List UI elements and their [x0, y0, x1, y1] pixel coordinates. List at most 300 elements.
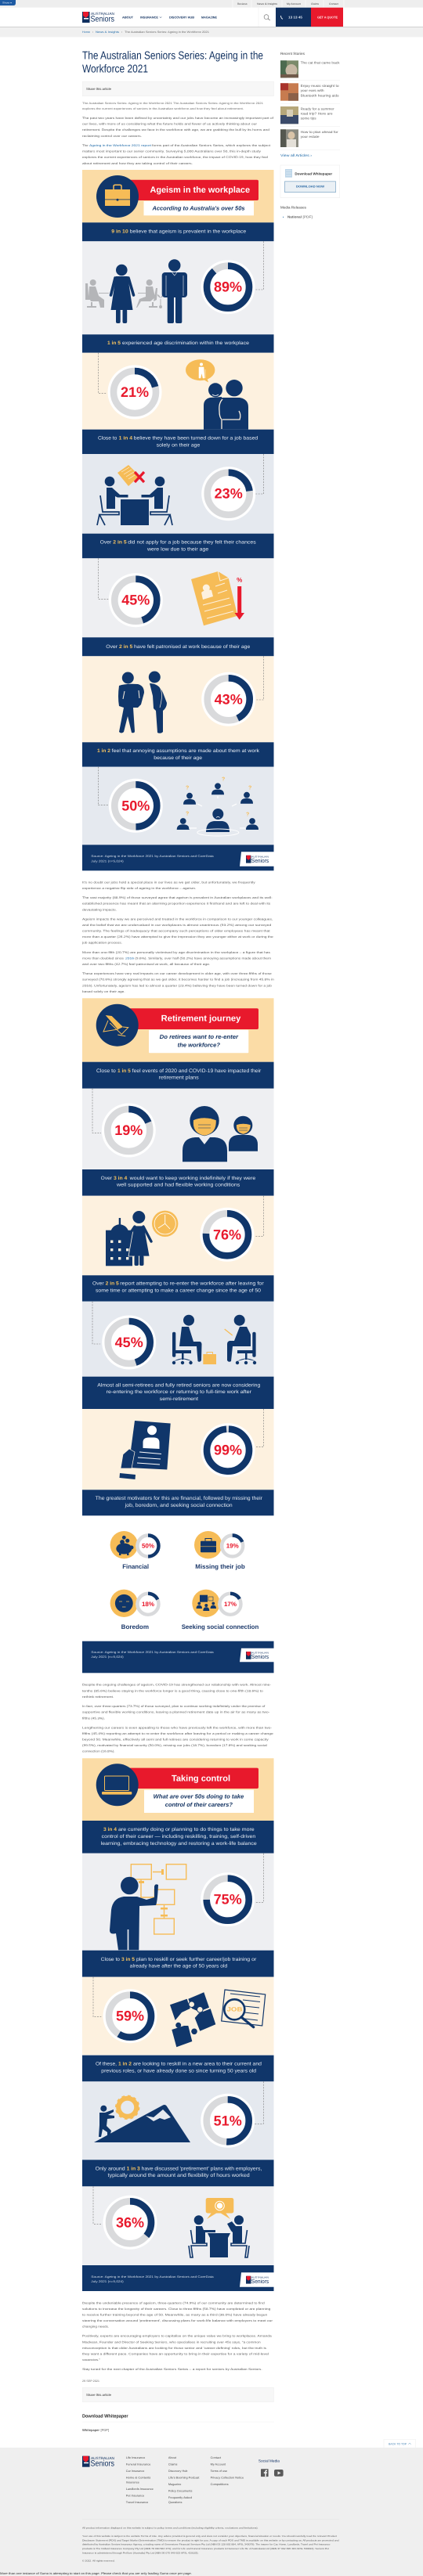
intro text: explores the current experiences of seniors in the Australian workforce and how they feel about retirement. — [82, 107, 244, 110]
donut: 19%: 19% — [114, 1122, 143, 1138]
back to top tab — [384, 2439, 415, 2448]
main navigation: ABOUT — [122, 16, 134, 19]
icon: person surrounded by questioning people: ? — [248, 786, 251, 791]
stat band: 1 in 2 reskill — [82, 2055, 274, 2081]
logo tab — [240, 2272, 274, 2287]
stat band: over 2 in 5 did not apply: were low due to their age — [146, 546, 209, 553]
legal text: All product information displayed on this website is subject to policy terms and conditions (including eligibility criteria, exclusions and limitations). — [82, 2527, 258, 2530]
source footer band 1: July 2021 (n=5,024) — [91, 859, 125, 863]
body text: retirement: supportive and flexible working conditions, leaving a planned retirement date up in the air for as many as two- — [82, 1711, 270, 1714]
stat band: 1 in 5: experienced age discrimination within the workplace — [122, 340, 250, 346]
breadcrumb: News & Insights — [96, 31, 119, 34]
icon: woman, building and clock — [106, 1211, 178, 1266]
story: bluetooth hearing aids: Bluetooth hearing aids — [301, 93, 339, 97]
stat band: 2 in 5 re-enter: Over — [92, 1281, 104, 1287]
panel: 99 percent — [82, 1409, 274, 1490]
download whitepaper section: Whitepaper — [82, 2428, 99, 2432]
footer links: company: Life's Booming Podcast — [168, 2476, 199, 2479]
donut: 45% second: 45% — [115, 1335, 143, 1350]
panel: 45 percent — [82, 558, 274, 637]
share bar lower — [82, 2387, 274, 2402]
donut: 21% — [108, 365, 161, 420]
body text: ageism: and over two-fifths (42.7%) feel patronised at work, all because of their age. — [82, 963, 210, 966]
panel: 43 percent — [82, 656, 274, 742]
legal text: © 2022. All rights reserved. — [82, 2559, 115, 2562]
logo tab: Seniors — [251, 2278, 269, 2285]
date: 29 SEP 2021 — [82, 2380, 99, 2383]
social media — [258, 2459, 284, 2477]
source footer band 3 — [82, 2265, 274, 2291]
donut: 45%: 45% — [121, 593, 150, 608]
body text: introduction: Ageing in the Workforce 2021 report — [89, 144, 152, 147]
logo tab: AUSTRALIAN — [251, 1652, 269, 1655]
story: bluetooth hearing aids — [280, 83, 339, 101]
stat band: 1 in 2 reskill: 1 in 2 — [118, 2062, 132, 2066]
body text: ageism: community. The feelings of inadequacy that accompany such perceptions of older employees has meant that — [82, 930, 271, 933]
banner: retirement journey: the workforce? — [178, 1041, 220, 1049]
sidebar: whitepaper card — [280, 165, 340, 198]
footer links: insurance: Car Insurance — [126, 2470, 144, 2473]
motivator: seeking social connection: Seeking social connection — [182, 1623, 258, 1630]
source footer band 1 — [82, 845, 274, 870]
story: plan ahead for estate: your estate — [301, 135, 320, 139]
footer logo — [82, 2456, 114, 2468]
body text: ageism: more than doubled since — [82, 957, 124, 960]
script notice: More than one instance of Sumo is attempting to start on this page. Please check that you are only loading Sumo once per page. — [0, 2571, 192, 2575]
stat band: 1 in 5: 1 in 5 — [107, 340, 121, 346]
sidebar: media releases: [PDF] — [302, 215, 313, 219]
stat band: 1 in 5 retirement plans: Close to — [96, 1068, 116, 1074]
legal text — [82, 2527, 339, 2562]
breadcrumb: › — [92, 31, 94, 34]
source footer band 2: July 2021 (n=5,024) — [91, 1655, 125, 1659]
top utility bar: Claims — [311, 2, 319, 5]
icon: rejected job interview — [97, 465, 172, 525]
panel: 51 percent — [82, 2081, 274, 2160]
banner: retirement journey: Do retirees want to re-enter — [160, 1033, 239, 1040]
stat band: 2 in 5 re-enter — [82, 1275, 274, 1302]
legal text: Disclosure Statement (PDS) and Target Market Determination (TMD) to ensure the product is right for you. A copy of each PDS and TMD is available on this website or by contacting us. All products are promoted and — [82, 2538, 339, 2542]
stat band: 1 in 4: believe they have been turned down for a job based — [134, 435, 258, 441]
body text: ageism: These experiences have very real impacts on our career development in older age, with over three-fifths of those — [82, 972, 272, 975]
panel: 19 percent — [82, 1089, 274, 1169]
body text: retirement: In fact, over three-quarters (73.7%) of those surveyed, plan to continue working indefinitely under the premise of — [82, 1705, 266, 1708]
body text: ageism: experience a negative flip side of ageing in the workforce – ageism. — [82, 887, 196, 890]
stat band: semi-retirees: re-entering the workforce or returning to full-time work after — [107, 1389, 251, 1395]
icon: two people talking down — [118, 672, 167, 733]
main navigation: MAGAZINE — [201, 16, 217, 19]
body text: retirement: Lengthening our careers is even appealing to those who have previously left the workforce, with more than two- — [82, 1726, 273, 1729]
body text: introduction: forms part of the Australian Seniors Series, which explores the subject — [152, 144, 271, 147]
footer links: account — [211, 2456, 244, 2486]
stat band: pretirement: Only around — [96, 2167, 125, 2171]
stat band: 3 in 5: already have after the age of 50 years old — [130, 1963, 228, 1969]
body text: taking control: they want a different pace. Companies have an opportunity to bring in their expertise for a variety of mid-level — [82, 2353, 269, 2356]
body text: taking control: vacancies." — [82, 2358, 101, 2362]
body text: retirement: connection (16.8%). — [82, 1750, 115, 1753]
donut: 51% — [201, 2094, 255, 2148]
banner: taking control — [82, 1758, 274, 1821]
top utility bar: Reviews — [237, 2, 248, 5]
legal text: Your use of this website is subject to the website Terms of Use. Any advice provided is general only and does not consider your objectives, financial situation or needs. You should carefully read the relevant Product — [82, 2535, 337, 2538]
legal text: distributed by Australian Seniors Insurance Agency, a trading name of Greenstone Financial Services Pty Ltd (ABN 53 128 692 884, AFSL 343079). The insurer for Car, Home, Landlords, Travel and Pet Insurance — [82, 2543, 331, 2546]
story: summer road trip: some tips — [301, 116, 316, 121]
donut: 76% — [201, 1208, 254, 1262]
stat band: 3 in 4: would want to keep working indefinitely if they were — [129, 1176, 256, 1181]
donut: 59% — [103, 1989, 157, 2043]
logo tab: AUSTRALIAN — [251, 855, 269, 858]
stat band: 2 in 5 re-enter: 2 in 5 — [106, 1281, 119, 1287]
body text: retirement — [82, 1684, 273, 1753]
stat band: 1 in 4: Close to — [98, 435, 118, 441]
footer links: account: My Account — [211, 2463, 226, 2466]
stat band: patronised: Over — [106, 644, 118, 650]
footer links: insurance: Life Insurance — [126, 2456, 145, 2459]
banner: ageism in the workplace: According to Australia's over 50s — [152, 205, 244, 211]
body text: ageism: 2016 — [125, 957, 134, 960]
stat band: pretirement: have discussed 'pretirement' plans with employers, — [142, 2167, 262, 2171]
body text: ageism: It's no doubt our jobs hold a special place in our lives as we get older, but unfortunately, we frequently — [82, 881, 255, 884]
icon: meeting with speech bubble — [189, 2198, 249, 2257]
body text: taking control: Mackean, Founder and Director of Seeking Seniors, who specialises in recruiting over 45s says, "a common — [82, 2340, 261, 2344]
stat band: 1 in 5 retirement plans: retirement plans — [159, 1075, 199, 1080]
main navigation — [122, 16, 217, 19]
title: Workforce 2021 — [82, 63, 148, 75]
donut: 51%: 51% — [214, 2113, 242, 2128]
download whitepaper section — [82, 2414, 274, 2432]
panel: 23 percent — [82, 454, 274, 534]
stat band: patronised: have felt patronised at work because of their age — [134, 644, 251, 650]
logo — [82, 12, 114, 24]
footer links: insurance — [126, 2456, 154, 2504]
sidebar: recent stories: Recent Stories — [280, 52, 306, 56]
story: the cat that came back: The cat that came back — [301, 61, 341, 64]
donut: 75% — [201, 1872, 255, 1926]
stat band: over 2 in 5 did not apply — [82, 534, 274, 558]
footer logo: AUSTRALIAN — [91, 2456, 114, 2460]
body text: introduction: about retirement and how they are taking control of their careers. — [82, 162, 193, 165]
donut: 75%: 75% — [214, 1892, 242, 1908]
stat band: 1 in 5 — [82, 334, 274, 353]
body text: ageism: based solely on their age. — [82, 990, 125, 993]
stat band: 3 in 4 taking control: are currently doing or planning to do things to take more — [118, 1827, 255, 1832]
logo tab — [240, 852, 274, 866]
stat band: 9 in 10 — [82, 222, 274, 241]
stat band: over 2 in 5 did not apply: 2 in 5 — [113, 540, 127, 545]
title — [82, 49, 263, 75]
top utility bar: Contact — [329, 2, 338, 5]
stat band: 1 in 2 reskill: are looking to reskill in a new area to their current and — [133, 2062, 262, 2066]
source footer band 3: Source: Ageing in the Workforce 2021 by Australian Seniors and CoreData — [91, 2275, 215, 2279]
body text: retirement: fifths (45.3%). — [82, 1717, 105, 1720]
donut: 76%: 76% — [213, 1227, 241, 1242]
donut: 45% — [109, 573, 163, 627]
icon: hand holding resume — [119, 1421, 171, 1479]
panel: 45 percent re-entering — [82, 1302, 274, 1377]
story: summer road trip — [280, 106, 334, 124]
footer links: company: Frequently Asked — [168, 2496, 192, 2499]
stat band: pretirement: 1 in 3 — [127, 2167, 140, 2171]
banner: taking control: control of their careers? — [165, 1801, 233, 1808]
body text: ageism: 2016). Unfortunately, ageism has led to almost a quarter (23.4%) believing they have been turned down for a job — [82, 984, 272, 987]
body text: ageism: (9.6%). Similarly, over half (50.2%) have annoying assumptions made about them — [135, 957, 271, 960]
body text: ageism — [81, 881, 274, 993]
footer links: company: Questions — [168, 2501, 183, 2504]
stat band: assumptions: 1 in 2 — [97, 748, 111, 754]
body text: retirement: beyond 50. Meanwhile, effectively all semi and full retirees are considering returning to work in some capacity — [82, 1738, 269, 1741]
body text: ageism: established presence has meant that an alarming proportion experience it firsthand and are left to deal with its — [82, 903, 270, 906]
footer links: company: About — [168, 2456, 176, 2459]
source footer band 1: Source: Ageing in the Workforce 2021 by Australian Seniors and CoreData — [91, 854, 215, 858]
stat band: 1 in 4: 1 in 4 — [119, 435, 133, 441]
stat band: 3 in 4 — [82, 1169, 274, 1196]
body text: taking control: Stay tuned for the next chapter of the Australian Seniors Series – a report for seniors by Australian Seniors. — [82, 2368, 262, 2371]
donut: 36%: 36% — [116, 2214, 144, 2230]
banner: ageism in the workplace — [82, 170, 274, 222]
body text: introduction: reclaiming control over our careers. — [82, 135, 142, 138]
main navigation: INSURANCE — [140, 16, 158, 19]
stat band: patronised — [82, 637, 274, 656]
body text: retirement: tenths (85.6%) believe staying in the workforce longer is a good thing, causing close to one-fifth (18.6%) to — [82, 1689, 263, 1692]
body text: ageism: The vast majority (88.9%) of those surveyed agree that ageism is prevalent in Australian workplaces and its well- — [82, 896, 273, 899]
motivator: boredom: 18% — [142, 1601, 154, 1608]
stat band: 1 in 5 retirement plans: feel events of 2020 and COVID-19 have impacted their — [132, 1068, 262, 1074]
sidebar: media releases — [280, 205, 313, 219]
breadcrumb: Home — [82, 31, 90, 34]
stat band: semi-retirees: semi-retirement — [160, 1396, 198, 1402]
stat band: motivators: job, boredom, and seeking social connection — [125, 1503, 233, 1508]
stat band: 1 in 5 retirement plans — [82, 1062, 274, 1089]
stat band: pretirement — [82, 2160, 274, 2186]
icon: search — [264, 15, 270, 20]
top utility bar — [0, 0, 423, 8]
banner: retirement journey — [82, 998, 274, 1062]
icon: resume with falling percent arrow — [191, 571, 244, 625]
logo tab: AUSTRALIAN — [251, 2275, 269, 2279]
body text: retirement: (99.5%), motivated by financial security (50.0%), missing our jobs (18.7%), boredom (17.8%) and seeking social — [82, 1744, 267, 1747]
motivator: missing their job — [194, 1531, 245, 1570]
icon: laptop — [102, 1776, 132, 1795]
stat band: 3 in 5: plan to reskill or seek further career/job training or — [136, 1957, 256, 1962]
story: summer road trip: Ready for a summer — [301, 106, 334, 111]
icon: resume with falling percent arrow: % — [237, 576, 242, 584]
footer — [0, 2448, 423, 2576]
stat band: 9 in 10: 9 in 10 — [111, 229, 128, 234]
stat band: 1 in 4: solely on their age — [157, 443, 201, 448]
body text: ageism: devastating impacts. — [82, 908, 117, 911]
icon: puzzle — [170, 1992, 215, 2047]
icon: facebook — [261, 2469, 269, 2477]
banner: taking control: Taking control — [172, 1774, 230, 1783]
stat band: 3 in 4 taking control: control of their career — including reskilling, training, self-driven — [102, 1834, 256, 1839]
top utility bar: My Account — [287, 2, 301, 5]
icon: two colleagues gossiping about age — [186, 359, 248, 430]
quote button: GET A QUOTE — [317, 16, 338, 19]
sidebar: recent stories: View all Articles › — [280, 153, 313, 157]
body text: ageism: more than a quarter (26.2%) have attempted to give the impression they are younger either at work or during the — [82, 935, 273, 939]
body text: ageism: and the belief that we are undervalued in our workplaces is almost unanimous (93.2%) among our surveyed — [82, 924, 271, 927]
stat band: 3 in 5 — [82, 1951, 274, 1977]
body text: introduction — [82, 117, 274, 165]
panel: 36 percent — [82, 2186, 274, 2265]
breadcrumb: The Australian Seniors Series: Ageing in the Workforce 2021 — [125, 31, 209, 34]
icon: person surrounded by questioning people: ? — [222, 776, 225, 783]
breadcrumb: › — [121, 31, 123, 34]
panel: 89 percent — [82, 241, 274, 334]
stat band: 3 in 4 taking control — [82, 1821, 274, 1854]
logo tab — [240, 1648, 274, 1662]
stat band: 3 in 4 taking control: 3 in 4 — [103, 1827, 118, 1832]
donut: 45% second — [102, 1315, 156, 1370]
sidebar: media releases: Media Releases — [280, 205, 307, 210]
icon: deck chair — [103, 1015, 128, 1036]
banner: taking control: What are over 50s doing to take — [154, 1792, 244, 1800]
panel: 21 percent — [82, 353, 274, 430]
legal text: products is The Hollard Insurance Company Pty Ltd (ABN 78 090 584 473); and for Life and Funeral Insurance products is Hannover Life Re of Australasia Ltd (ABN 37 062 395 484 AFSL 530813). Seniors Pet — [82, 2547, 329, 2550]
download whitepaper section: [PDF] — [100, 2428, 109, 2432]
donut: 89%: 89% — [214, 279, 242, 295]
source footer band 3: July 2021 (n=5,024) — [91, 2279, 125, 2283]
story: bluetooth hearing aids: your ears with — [301, 88, 324, 92]
body text: taking control: changing needs. — [82, 2326, 109, 2329]
body text: introduction: The — [82, 144, 88, 147]
donut: 43%: 43% — [215, 691, 243, 707]
footer links: insurance: Insurance — [126, 2481, 139, 2484]
story: plan ahead for estate — [280, 129, 338, 147]
body text: ageism: More than one-fifth (20.7%) are personally victimised by age discrimination in the workplace – a figure that has — [82, 951, 270, 954]
footer links: company — [168, 2456, 199, 2504]
stat band: 2 in 5 re-enter: report attempting to re-enter the workforce after leaving for — [120, 1281, 264, 1287]
top utility bar: News & Insights — [257, 2, 277, 5]
stat band: 3 in 5: Close to — [101, 1957, 121, 1962]
stat band: 3 in 5: 3 in 5 — [121, 1957, 136, 1962]
motivator: financial: Financial — [122, 1563, 149, 1570]
intro text: The Australian Seniors Series: Ageing in the Workforce 2021 The Australian Seniors Series: Ageing in the Workforce 2021 — [82, 102, 263, 105]
top utility bar: Show ▾ — [2, 2, 13, 5]
body text: ageism: Ageism impacts the way we are perceived and treated in the workforce in comparison to our younger colleagues, — [82, 917, 273, 921]
banner: ageism in the workplace: Ageism in the workplace — [150, 186, 250, 195]
button: download now: DOWNLOAD NOW — [296, 185, 324, 188]
phone button — [276, 8, 311, 27]
body text: retirement: fifths (45.4%) reporting an attempt to re-enter the workforce after leaving for a period or making a career change — [82, 1732, 273, 1735]
donut: 23%: 23% — [215, 486, 243, 502]
share bar lower: Share this article — [86, 2393, 112, 2397]
footer links: account: Terms of use — [211, 2470, 227, 2473]
icon: job search document: JOB — [227, 2005, 243, 2013]
motivator: boredom — [110, 1590, 161, 1630]
stat band: 3 in 4: 3 in 4 — [114, 1176, 128, 1181]
donut: 43% — [201, 672, 255, 726]
icon: whitepaper — [285, 169, 292, 178]
source footer band 2: Source: Ageing in the Workforce 2021 by Australian Seniors and CoreData — [91, 1650, 215, 1654]
stat band: semi-retirees: Almost all semi-retirees and fully retired seniors are now considering — [97, 1382, 261, 1389]
body text: introduction: retirement. Despite the challenges we face in the workforce with age, we are grabbing the bull by its horns and — [82, 128, 269, 132]
donut: 89% — [201, 260, 255, 314]
donut: 59%: 59% — [116, 2009, 144, 2024]
stat band: 1 in 5 retirement plans: 1 in 5 — [118, 1068, 131, 1074]
sidebar: media releases: National — [287, 215, 302, 219]
icon: youtube — [274, 2470, 284, 2477]
panel: motivators — [110, 1531, 258, 1630]
stat band: 1 in 2 reskill: previous roles, or have already done so since turning 50 years old — [101, 2068, 257, 2074]
banner: retirement journey: Retirement journey — [161, 1014, 241, 1023]
body text: introduction: matters most important to our senior community. Surveying 5,000 Australians over 50, this in-depth study — [82, 150, 261, 153]
stat band: 3 in 4: Over — [101, 1176, 112, 1181]
source footer band 2 — [82, 1641, 274, 1673]
legal text: Insurance is administered through PetSure (Australia) Pty Ltd (ABN 95 075 949 923 AFSL 420183). — [82, 2551, 199, 2554]
motivator: missing their job: Missing their job — [195, 1563, 245, 1570]
story: plan ahead for estate: How to plan ahead for — [301, 130, 338, 134]
stat band: over 2 in 5 did not apply: did not apply for a job because they felt their chances — [128, 540, 256, 545]
body text: taking control — [82, 2301, 273, 2371]
stat band: over 2 in 5 did not apply: Over — [100, 540, 111, 545]
icon: seated job interview — [172, 1315, 256, 1364]
icon: person surrounded by questioning people: ? — [186, 811, 189, 817]
stat band: 9 in 10: believe that ageism is prevalent in the workplace — [130, 229, 247, 234]
motivator: seeking social connection: 17% — [224, 1601, 237, 1608]
footer links: insurance: Funeral Insurance — [126, 2463, 150, 2466]
panel: 59 percent — [82, 1977, 274, 2055]
body text: introduction: The past two years have been defined by uncertainty and our jobs have become an increasingly important part of — [82, 117, 274, 120]
stat band: motivators: The greatest motivators for this are financial, followed by missing their — [96, 1496, 263, 1501]
footer links: account: Contact — [211, 2456, 221, 2459]
intro text — [82, 102, 263, 110]
footer links: account: Competitions — [211, 2483, 229, 2486]
sidebar: whitepaper card: Download Whitepaper — [295, 171, 333, 175]
stat band: assumptions: feel that annoying assumptions are made about them at work — [112, 748, 260, 754]
body text: taking control: Despite the undeniable presence of ageism, three-quarters (74.9%) of our community are determined to find — [82, 2301, 265, 2304]
icon: person surrounded by questioning people: ? — [186, 786, 189, 791]
stat band: motivators — [82, 1490, 274, 1515]
footer links: insurance: Landlords Insurance — [126, 2488, 154, 2491]
footer links: company: Claims — [168, 2463, 178, 2466]
donut: 36% — [103, 2196, 157, 2250]
quote button — [311, 8, 343, 27]
icon: person surrounded by questioning people: ? — [246, 812, 249, 817]
logo tab: Seniors — [251, 1653, 269, 1660]
donut: 99% — [201, 1423, 255, 1477]
body text: taking control: misconception is that older Australians are looking for those senior and 'career-defining' roles, but the truth is — [82, 2347, 266, 2350]
stat band: 1 in 2 reskill: Of these, — [96, 2062, 117, 2066]
stat band: 2 in 5 re-enter: some time or attempting to make a career change since the age of 50 — [96, 1288, 262, 1293]
donut: 99%: 99% — [214, 1443, 242, 1458]
logo tab: Seniors — [251, 857, 269, 864]
footer links: insurance: Home & Contents — [126, 2476, 151, 2479]
stat band: 3 in 4: well supported and had flexible working conditions — [116, 1182, 240, 1188]
icon: office workers — [85, 259, 187, 323]
footer links: company: Discovery Hub — [168, 2470, 187, 2473]
body text: introduction: our lives, with more of us considering what the future holds and fewer of us actively thinking about our — [82, 123, 258, 126]
footer links: insurance: Pet Insurance — [126, 2495, 144, 2498]
phone button: 13 13 45 — [288, 16, 303, 19]
icon: person surrounded by questioning people — [177, 776, 258, 836]
share bar: Share this article — [86, 87, 112, 91]
stat band: semi-retirees — [82, 1377, 274, 1409]
icon: person pushing gear up a mountain — [94, 2096, 190, 2142]
sidebar: recent stories — [280, 52, 341, 157]
body text: ageism: job application process. — [81, 942, 122, 945]
body text: taking control: solutions to increase the longevity of their careers. Close to three-fifths (58.7%) have completed or are planning — [82, 2308, 270, 2311]
motivator: boredom: Boredom — [121, 1623, 149, 1630]
logo: Seniors — [91, 15, 114, 24]
breadcrumb — [0, 27, 423, 37]
logo: AUSTRALIAN — [91, 12, 114, 16]
back to top tab: BACK TO TOP — [389, 2442, 407, 2445]
icon: job search document — [222, 1990, 266, 2027]
story: bluetooth hearing aids: Enjoy music straight to — [301, 84, 339, 88]
stat band: assumptions: because of their age — [154, 755, 203, 761]
stat band: 1 in 4 — [82, 430, 274, 454]
